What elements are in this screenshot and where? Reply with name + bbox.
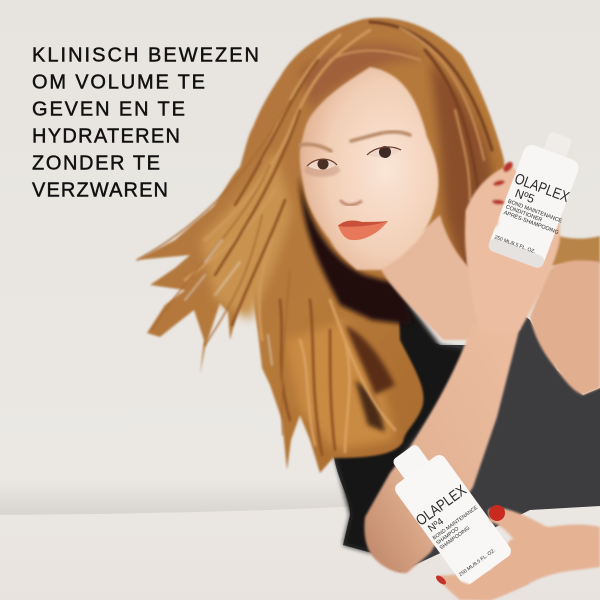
headline: KLINISCH BEWEZEN bbox=[32, 44, 259, 66]
bottle no. 4: SHAMPOOING bbox=[439, 525, 471, 551]
bottle body bbox=[487, 142, 581, 270]
neck and chest bbox=[380, 215, 495, 340]
cap bbox=[391, 443, 432, 484]
bottle body bbox=[392, 452, 514, 588]
brand: OLAPLEX bbox=[413, 482, 470, 530]
thumb and nails of lower hand bbox=[434, 505, 560, 600]
model with hair bbox=[137, 18, 600, 600]
hair: strand behind bottle bbox=[545, 232, 600, 266]
nose bbox=[340, 200, 362, 205]
lower hand bbox=[437, 525, 600, 600]
nails bbox=[492, 160, 515, 205]
facial features bbox=[300, 132, 410, 240]
headline bbox=[32, 44, 259, 202]
headline: OM VOLUME TE bbox=[32, 72, 205, 94]
product number: Nº4 bbox=[426, 516, 446, 535]
brand: OLAPLEX bbox=[512, 170, 571, 206]
bottle no. 4 bbox=[379, 434, 514, 588]
lips bbox=[338, 221, 388, 240]
brows bbox=[300, 132, 410, 151]
black dress bbox=[333, 285, 600, 572]
headline: HYDRATEREN bbox=[32, 126, 180, 148]
eyes bbox=[304, 146, 401, 177]
hair: strands bbox=[137, 22, 492, 455]
bottle no. 5 bbox=[487, 125, 591, 271]
headline: VERZWAREN bbox=[32, 180, 168, 202]
hand holding bottle bbox=[465, 165, 560, 335]
face bbox=[300, 67, 438, 270]
product number: Nº5 bbox=[513, 186, 537, 206]
fingers on bottle bbox=[466, 160, 516, 240]
headline: ZONDER TE bbox=[32, 152, 160, 174]
hair: main mass bbox=[137, 18, 600, 473]
floor surface bbox=[0, 500, 600, 600]
product label: BOND MAINTENANCE bbox=[507, 199, 563, 225]
hair: tonal zones bbox=[200, 44, 495, 450]
bottle no. 5: CONDITIONER bbox=[505, 204, 543, 224]
right shoulder bbox=[530, 260, 600, 395]
bottle no. 4: SHAMPOO bbox=[435, 526, 460, 546]
cap bbox=[542, 131, 573, 162]
bottle no. 5: 250 ML/8.5 FL. OZ. bbox=[494, 234, 536, 255]
bottle no. 4: 250 ML/8.5 FL. OZ. bbox=[458, 548, 497, 578]
arm raised to bottle bbox=[364, 323, 520, 573]
headline: GEVEN EN TE bbox=[32, 98, 185, 120]
bottle no. 5: APRÈS-SHAMPOOING bbox=[503, 209, 560, 236]
product label: BOND MAINTENANCE bbox=[432, 505, 480, 542]
